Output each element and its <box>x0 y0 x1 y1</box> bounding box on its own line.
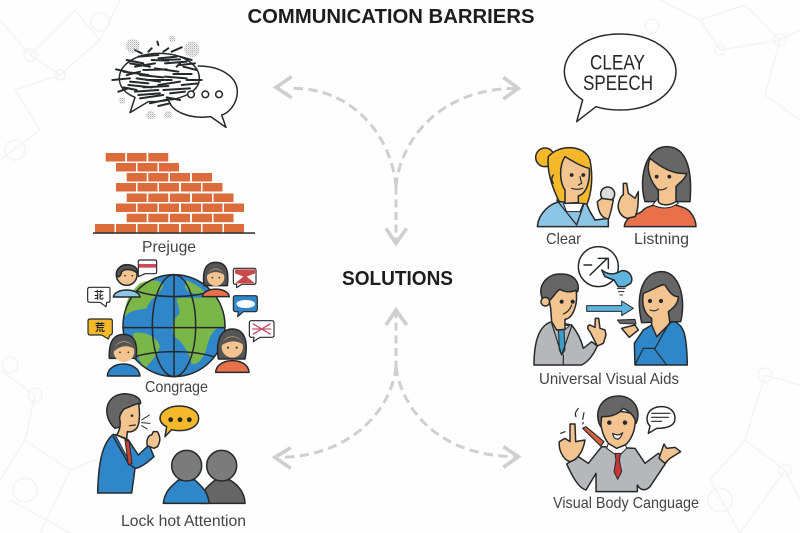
speech bubbles in many languages <box>88 260 274 342</box>
blue arrow <box>587 301 633 316</box>
heading: solutions: SOLUTIONS <box>342 268 453 290</box>
label: lock hot attention: Lock hot Attention <box>121 513 246 530</box>
icon: two people talking and listening <box>536 147 696 227</box>
woman with gray hair <box>618 147 696 227</box>
speech bubble: clear speech: SPEECH <box>583 72 653 95</box>
label: visual body canguage: Visual Body Canguage <box>553 495 699 512</box>
person: bottom right <box>216 329 249 372</box>
woman in blue suit <box>617 272 687 365</box>
icon: universal visual aids <box>534 247 687 365</box>
arrows: connectors between barriers and solutions <box>275 77 518 468</box>
listeners from behind <box>163 450 245 503</box>
icon: tangled speech bubbles <box>112 36 237 127</box>
man gesturing <box>559 396 681 492</box>
woman with yellow hair <box>536 148 615 227</box>
label: clear: Clear <box>546 231 582 248</box>
speaker <box>98 394 160 493</box>
person: top right <box>202 262 229 297</box>
person: top left <box>113 265 140 297</box>
marker pen <box>561 408 604 446</box>
speech bubble with dots <box>160 406 199 437</box>
icon: speaker with inattentive listeners <box>98 394 245 503</box>
icon: visual body language <box>559 396 681 492</box>
title: COMMUNICATION BARRIERS <box>248 6 534 28</box>
speech bubble: clear speech: CLEAY <box>590 52 645 74</box>
label: universal visual aids: Universal Visual Aids <box>539 371 679 388</box>
icon: globe with speakers of many languages: 荒 <box>95 321 105 334</box>
icon: brick wall <box>93 153 255 234</box>
man in gray suit <box>534 274 606 365</box>
speech bubble with lines <box>647 407 675 433</box>
chart circle and bulb <box>578 247 632 295</box>
person: bottom left <box>107 334 140 376</box>
label: congrage: Congrage <box>145 379 208 396</box>
icon: globe with speakers of many languages: 苝 <box>94 289 104 302</box>
globe <box>123 275 225 377</box>
speech bubble: clear speech <box>564 34 676 122</box>
icon: globe with speakers of many languages <box>88 260 274 377</box>
label: prejuge: Prejuge <box>142 239 196 256</box>
label: listning: Listning <box>634 231 689 248</box>
